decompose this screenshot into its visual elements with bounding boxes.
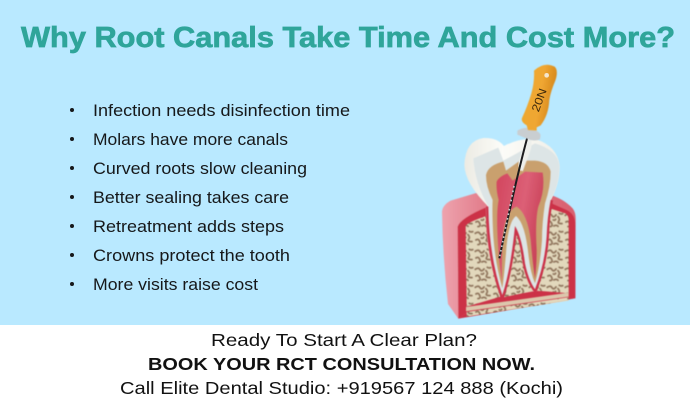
- bullet: sealing: Better sealing takes care: [93, 188, 289, 207]
- file threads: [499, 186, 514, 258]
- footer: call to action: BOOK YOUR RCT CONSULTATION NOW.: [148, 354, 535, 374]
- endodontic file: [499, 65, 557, 258]
- bullet: visits: More visits raise cost: [93, 275, 258, 294]
- gum block: [442, 191, 576, 319]
- footer panel: [0, 325, 690, 407]
- tooth crown back: [464, 138, 559, 207]
- title: Why Root Canals Take Time And Cost More?: [21, 22, 675, 54]
- bullet: molars: Molars have more canals: [93, 130, 288, 149]
- illustration: tooth cross-section with endodontic file: [442, 65, 576, 319]
- bullet: retreatment: Retreatment adds steps: [93, 217, 284, 236]
- bone tissue: [466, 209, 569, 317]
- bullet list: [70, 101, 350, 294]
- footer: contact: Call Elite Dental Studio: +919567 124 888 (Kochi): [120, 378, 563, 398]
- periodontal ligament edge: [488, 200, 551, 295]
- bullet: crowns: Crowns protect the tooth: [93, 246, 290, 265]
- pulp chamber and canals: [497, 172, 543, 282]
- footer: prompt: Ready To Start A Clear Plan?: [211, 330, 477, 350]
- background panel: [0, 0, 690, 325]
- handle marking: 20N: [530, 87, 550, 114]
- access opening: [519, 139, 531, 170]
- handle hole: [544, 73, 549, 78]
- file shaft: [499, 137, 527, 258]
- bullet: infection: Infection needs disinfection time: [93, 101, 350, 120]
- enamel and root cementum: [473, 143, 559, 295]
- dentin: [486, 161, 551, 288]
- handle: [522, 65, 557, 131]
- stopper disc: [517, 128, 541, 141]
- bullet: curved roots: Curved roots slow cleaning: [93, 159, 307, 178]
